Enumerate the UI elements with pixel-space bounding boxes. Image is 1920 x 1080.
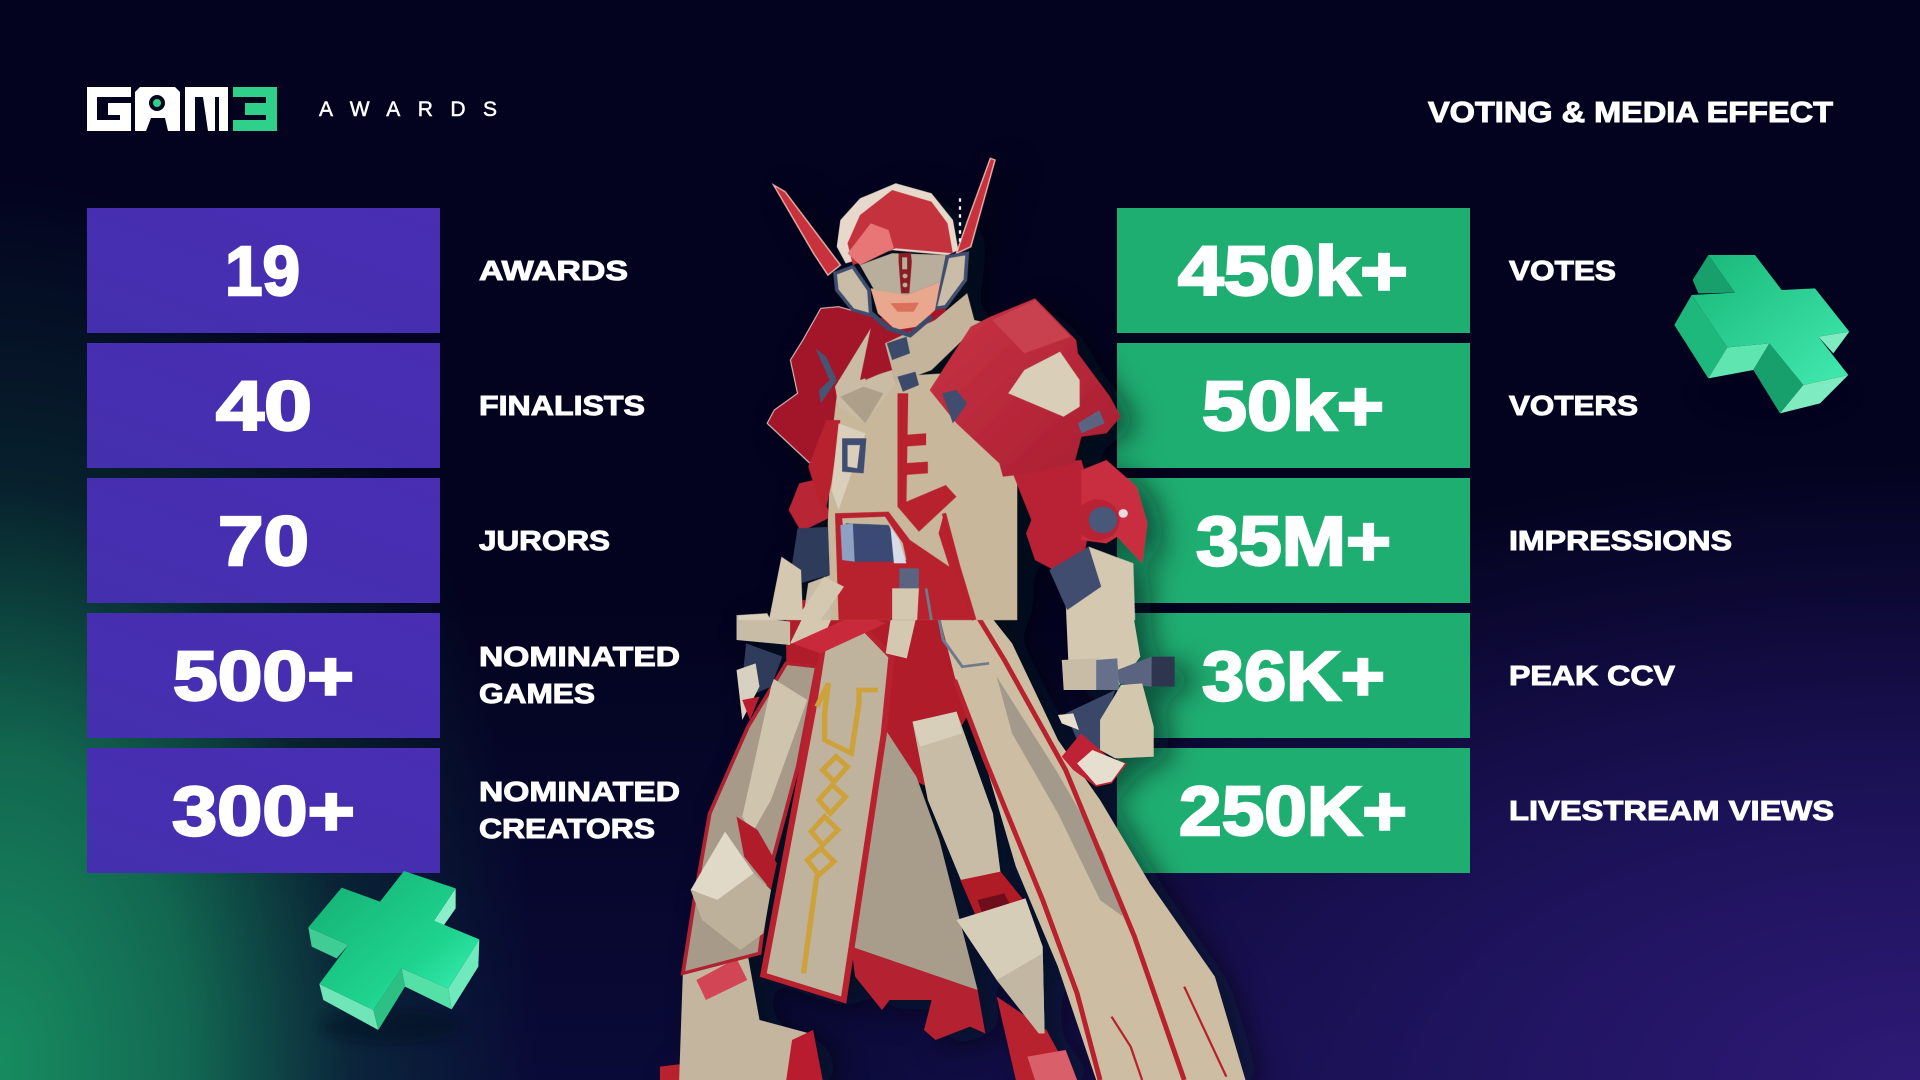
stat row: 19 awards [87,208,628,333]
stat row: 50k+ voters [1117,343,1638,468]
stat row: 35M+ impressions: IMPRESSIONS [1509,525,1732,556]
torso [828,373,1017,620]
stat row: 50k+ voters: VOTERS [1509,390,1638,421]
chest E-shaped piping [897,393,956,532]
stat row: 300+ nominated creators [87,748,680,873]
character lower body: coat and legs [660,600,1245,1080]
helmet [837,183,958,263]
ear cups [835,267,871,315]
stat row: 36K+ peak CCV: 36K+ [1202,637,1385,715]
stat row: 300+ nominated creators: 300+ [172,772,355,850]
logo word AWARDS: AWARDS [319,98,497,121]
stat row: 36K+ peak CCV [1117,613,1675,738]
right shoulder pauldron [930,298,1121,477]
logo: GAM3 Awards [87,87,497,131]
stat row: 35M+ impressions [1117,478,1732,603]
stat row: 50k+ voters: 50k+ [1202,367,1384,445]
stat row: 300+ nominated creators: CREATORS [479,813,655,844]
stat row: 500+ nominated games: GAMES [479,678,595,709]
logo letter G [87,87,131,131]
stat row: 40 finalists: 40 [216,367,312,445]
icon: green 3D cross, bottom left [308,871,479,1043]
logo letter M [185,87,228,131]
belt [835,512,974,620]
stat row: 250K+ livestream views [1117,748,1834,873]
stat row: 500+ nominated games [87,613,680,738]
collar [860,307,946,387]
stat row: 40 finalists [87,343,645,468]
stat row: 70 jurors [87,478,610,603]
face [871,282,940,330]
character upper body: helmet, armour and arm [739,158,1147,620]
back cape [767,307,903,463]
stat row: 19 awards: AWARDS [479,255,628,286]
illustration: armoured red and beige character [660,158,1245,1080]
stat row: 450k+ votes: VOTES [1509,255,1616,286]
stat row: 300+ nominated creators: NOMINATED [479,776,680,807]
heading: voting and media effect: VOTING & MEDIA EFFECT [1428,97,1833,129]
stat row: 500+ nominated games: NOMINATED [479,641,680,672]
stat row: 19 awards: 19 [225,232,300,310]
stat row: 450k+ votes [1117,208,1616,333]
stat row: 70 jurors: 70 [218,502,309,580]
panel: right voting and media statistics [1117,208,1834,873]
stat row: 36K+ peak CCV: PEAK CCV [1509,660,1675,691]
logo numeral 3 [233,87,277,131]
panel: left award statistics [87,208,680,873]
stat row: 250K+ livestream views: LIVESTREAM VIEWS [1509,795,1834,826]
stat row: 35M+ impressions: 35M+ [1196,502,1391,580]
stat row: 500+ nominated games: 500+ [173,637,354,715]
stat row: 70 jurors: JURORS [479,525,610,556]
right arm [1010,460,1094,573]
stat row: 250K+ livestream views: 250K+ [1179,772,1407,850]
logo letter A [135,87,180,131]
stat row: 40 finalists: FINALISTS [479,390,645,421]
visor with emblem [860,253,946,295]
left sleeve top [789,480,831,532]
icon: green 3D cross, top right [1674,255,1853,423]
stat row: 450k+ votes: 450k+ [1178,232,1408,310]
antennae [774,185,840,275]
